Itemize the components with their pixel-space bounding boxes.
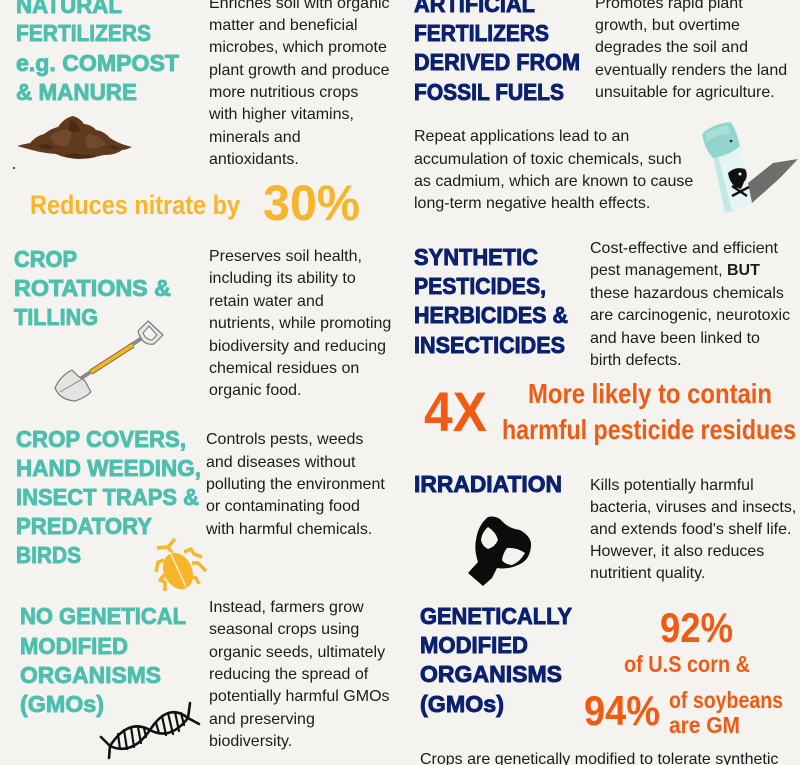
text block: toxic accumulation: accumulation of toxic chemicals, such [414,151,682,168]
text block: irradiation effects [590,477,796,582]
icon: DNA helix [101,703,199,758]
text block: no GMO benefits: potentially harmful GMOs [209,688,390,705]
heading: crop rotations and tilling [14,246,171,330]
heading: genetically modified organisms: ORGANISMS [420,661,562,687]
heading: crop rotations and tilling: TILLING [14,304,98,330]
stat: GM corn and soybeans: of soybeans [669,687,783,713]
heading: synthetic pesticides [414,244,568,358]
stat: GM corn and soybeans: 94% [584,687,660,734]
stat: 4X more likely [424,378,796,445]
text block: no GMO benefits: organic seeds, ultimately [209,644,385,661]
text block: crop rotation benefits: retain water and [209,293,324,310]
heading: synthetic pesticides: INSECTICIDES [414,332,565,358]
heading: natural fertilizers [16,0,179,105]
heading: natural fertilizers: FERTILIZERS [16,20,151,46]
text block: crop rotation benefits: including its ability to [209,270,356,287]
heading: crop covers: BIRDS [16,542,81,568]
text block: crop rotation benefits: nutrients, while promoting [209,315,391,332]
text block: synthetic pesticides effects: birth defects. [590,352,682,369]
heading: genetically modified organisms: GENETICALLY [420,603,572,629]
text block: irradiation effects: However, it also reduces [590,543,764,560]
heading: artificial fertilizers: FERTILIZERS [414,20,549,46]
text block: no GMO benefits: Instead, farmers grow [209,599,364,616]
text block: synthetic pesticides effects: Cost-effective and efficient [590,240,779,257]
text block: synthetic pesticides effects: pest management, BUT [590,262,760,279]
text block: crop rotation benefits: Preserves soil health, [209,248,362,265]
icon: shovel [55,321,163,401]
text block: crop cover benefits: polluting the environment [206,476,385,493]
stat: GM corn and soybeans: are GM [669,712,740,738]
text block: crop cover benefits: or contaminating food [206,498,360,515]
text block: artificial fertilizers effects: unsuitable for agriculture. [595,84,775,101]
text block: crop rotation benefits [209,248,391,399]
text block: no GMO benefits: seasonal crops using [209,621,359,638]
text block: no GMO benefits: reducing the spread of [209,666,369,683]
heading: crop rotations and tilling: ROTATIONS & [14,275,171,301]
text block: crop cover benefits: and diseases without [206,454,356,471]
text block: natural fertilizers benefits: with higher vitamins, [208,106,354,123]
heading: genetically modified organisms: (GMOs) [420,691,504,717]
stat: reduces nitrate by 30% [30,175,360,231]
text block: crop rotation benefits: organic food. [209,382,302,399]
stat: reduces nitrate by 30%: Reduces nitrate by [30,190,240,220]
text block: natural fertilizers benefits: minerals and [209,129,301,146]
text block: irradiation effects: and extends food's shelf life. [590,521,791,538]
text block: artificial fertilizers effects: eventually renders the land [595,62,787,79]
heading: genetically modified organisms: MODIFIED [420,632,528,658]
heading: no GMOs: ORGANISMS [20,662,161,688]
heading: no GMOs: (GMOs) [20,691,104,717]
text block: natural fertilizers benefits: matter and beneficial [209,17,358,34]
text block: no GMO benefits: and preserving [209,711,315,728]
icon: poison spray can [702,122,798,212]
text block: crop cover benefits: Controls pests, weeds [206,431,363,448]
text block: synthetic pesticides effects: and have been linked to [590,330,760,347]
icon: beetle [156,539,206,594]
text block: synthetic pesticides effects [590,240,790,369]
text block: toxic accumulation: long-term negative health effects. [414,195,650,212]
heading: synthetic pesticides: PESTICIDES, [414,273,546,299]
heading: natural fertilizers: & MANURE [16,79,137,105]
text block: no GMO benefits [209,599,390,750]
heading: crop covers [16,426,201,568]
text block: natural fertilizers benefits: microbes, which promote [209,39,387,56]
text block: toxic accumulation [414,128,693,212]
stat: GM corn and soybeans [584,604,783,738]
heading: crop covers: HAND WEEDING, [16,455,201,481]
heading: crop covers: PREDATORY [16,513,152,539]
stat: reduces nitrate by 30%: 30% [263,175,360,231]
text block: natural fertilizers benefits: plant growth and produce [209,62,390,79]
heading: synthetic pesticides: SYNTHETIC [414,244,538,270]
heading: no GMOs: MODIFIED [20,633,128,659]
stat: GM corn and soybeans: of U.S corn & [624,651,750,677]
text block: toxic accumulation: Repeat applications lead to an [414,128,629,145]
text block: irradiation effects: nutritient quality. [590,565,705,582]
text block: crop rotation benefits: biodiversity and reducing [209,338,386,355]
heading: crop covers: CROP COVERS, [16,426,186,452]
text block: natural fertilizers benefits [208,0,390,168]
text block: crop rotation benefits: chemical residues on [209,360,359,377]
icon: gas mask [468,517,531,586]
heading: genetically modified organisms [420,603,572,717]
heading: irradiation: IRRADIATION [414,471,562,497]
heading: natural fertilizers: e.g. COMPOST [16,50,179,76]
heading: crop covers: INSECT TRAPS & [16,484,199,510]
text block: crop cover benefits [205,431,385,538]
text block: crop cover benefits: with harmful chemicals. [205,521,372,538]
icon: compost pile [17,116,132,159]
text block: artificial fertilizers effects: growth, but overtime [595,17,740,34]
text block: no GMO benefits: biodiversity. [209,733,292,750]
text block: synthetic pesticides effects: are carcinogenic, neurotoxic [590,307,790,324]
heading: artificial fertilizers: FOSSIL FUELS [414,79,564,105]
text block: irradiation effects: Kills potentially harmful [590,477,754,494]
text block: artificial fertilizers effects: degrades the soil and [595,39,748,56]
heading: artificial fertilizers: DERIVED FROM [414,49,580,75]
stat: 4X more likely: 4X [424,380,487,443]
heading: no GMOs [20,603,186,717]
text block: toxic accumulation: as cadmium, which are known to cause [414,173,693,190]
heading: artificial fertilizers [414,0,580,105]
text block: irradiation effects: bacteria, viruses and insects, [590,499,796,516]
text block: synthetic pesticides effects: these hazardous chemicals [590,285,784,302]
heading: synthetic pesticides: HERBICIDES & [414,302,568,328]
text block: artificial fertilizers effects [595,0,787,101]
heading: crop rotations and tilling: CROP [14,246,77,272]
heading: no GMOs: NO GENETICAL [20,603,186,629]
text block: natural fertilizers benefits: more nutritious crops [209,84,358,101]
text block: natural fertilizers benefits: antioxidants. [209,151,299,168]
stray dot [13,167,15,169]
stat: GM corn and soybeans: 92% [660,604,733,651]
